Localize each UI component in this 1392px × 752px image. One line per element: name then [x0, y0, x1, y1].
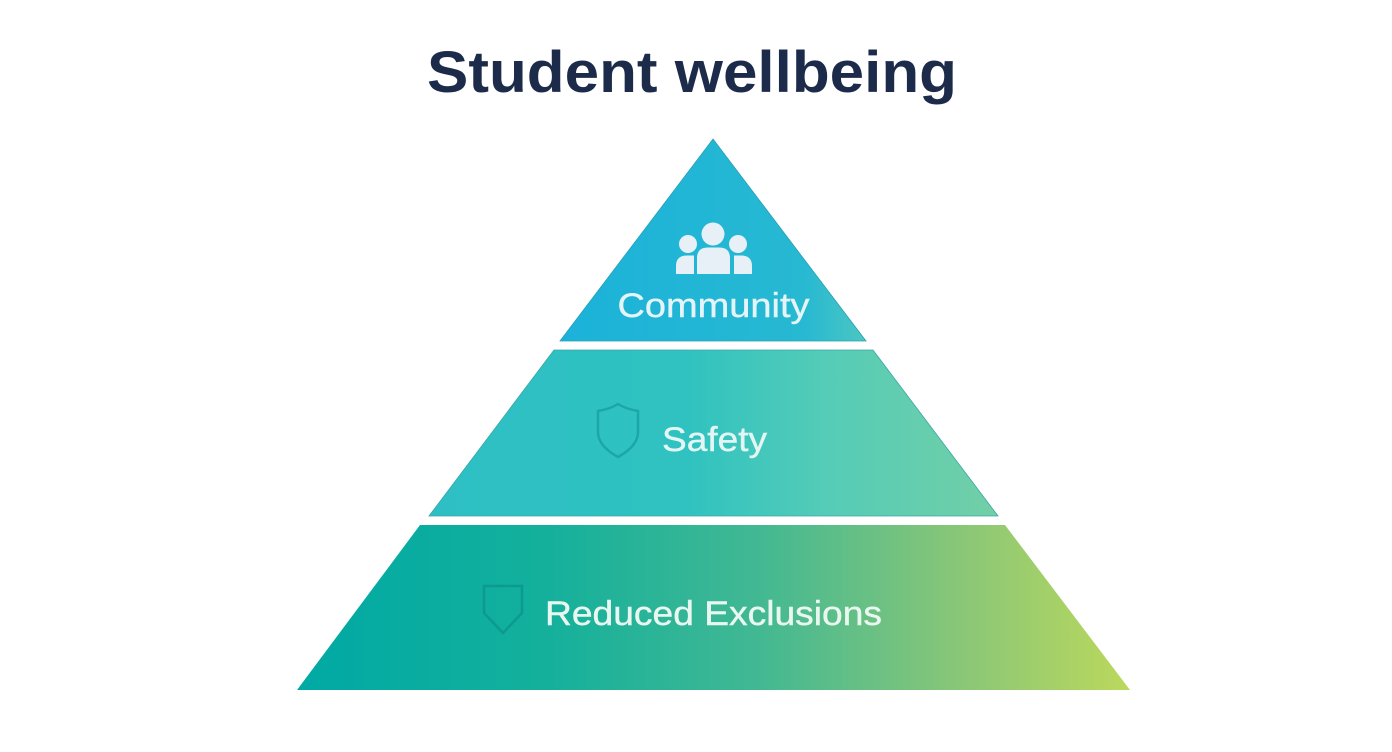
panel: community tier — [560, 139, 866, 341]
label: community: Community — [618, 287, 810, 325]
label: reduced exclusions: Reduced Exclusions — [545, 595, 882, 633]
icon: shield — [598, 404, 638, 457]
title: Student wellbeing — [427, 40, 957, 105]
icon: pentagon shield — [484, 586, 522, 633]
panel: reduced exclusions tier — [297, 525, 1130, 690]
panel: safety tier — [429, 350, 998, 516]
icon: people group — [676, 222, 752, 274]
label: safety: Safety — [662, 421, 767, 459]
